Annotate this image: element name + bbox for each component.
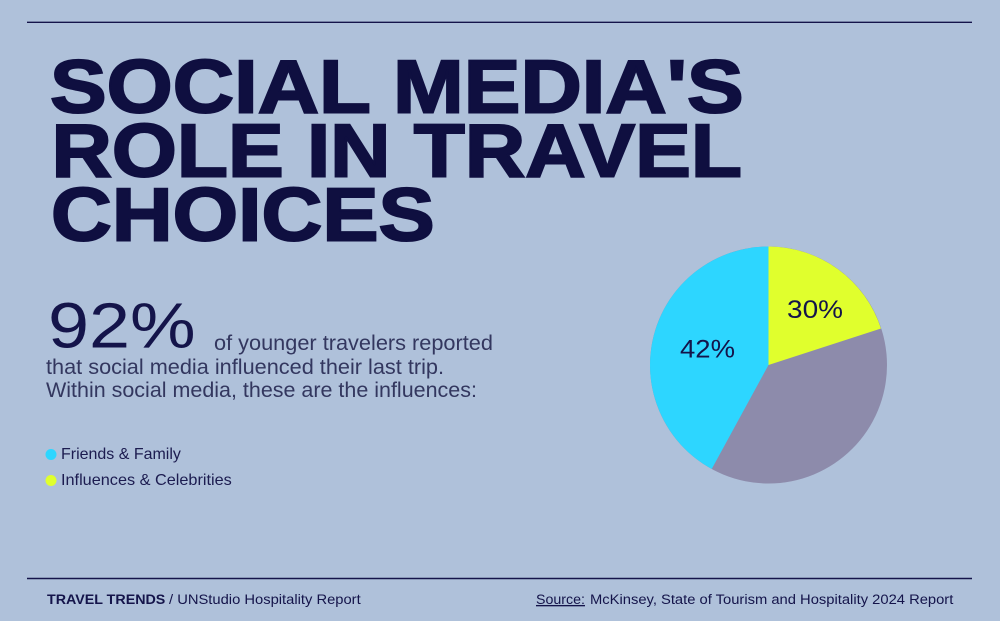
description bbox=[46, 331, 493, 402]
text block: key statistic bbox=[46, 289, 493, 402]
footer: source: Source: bbox=[536, 591, 585, 607]
footer: report name bbox=[47, 591, 361, 607]
label: 30%: 30% bbox=[787, 295, 843, 324]
footer: report name: / UNStudio Hospitality Report bbox=[169, 592, 361, 607]
title bbox=[50, 44, 744, 256]
description: of younger travelers reported bbox=[214, 331, 493, 355]
description: that social media influenced their last trip. bbox=[46, 355, 444, 379]
footer: report name: TRAVEL TRENDS bbox=[47, 591, 165, 607]
description: Within social media, these are the influences: bbox=[46, 378, 477, 402]
legend bbox=[46, 446, 232, 489]
title: SOCIAL MEDIA'S bbox=[50, 44, 744, 129]
label: 42%: 42% bbox=[680, 335, 735, 363]
slice: 30% influencers and celebrities bbox=[768, 246, 881, 365]
footer: source: McKinsey, State of Tourism and Hospitality 2024 Report bbox=[590, 592, 953, 607]
title: ROLE IN TRAVEL bbox=[52, 108, 742, 192]
big number: 92%: 92% bbox=[48, 289, 196, 361]
slice: 42% friends and family bbox=[650, 246, 768, 469]
legend item: influencers and celebrities: Influences & Celebrities bbox=[61, 472, 232, 489]
legend item: friends and family: Friends & Family bbox=[61, 446, 181, 463]
title: CHOICES bbox=[51, 173, 435, 256]
pie chart bbox=[650, 246, 887, 484]
